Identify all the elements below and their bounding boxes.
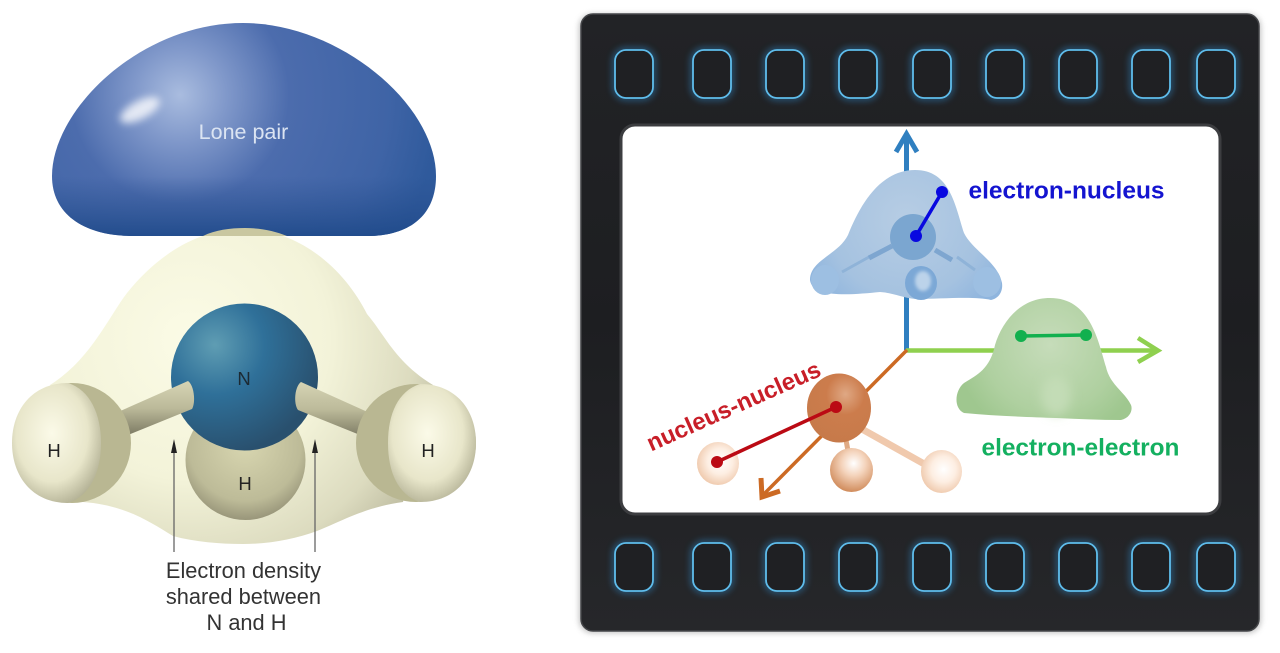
arrow: left shared density <box>171 439 177 552</box>
caption: electron density: Electron density <box>166 558 321 583</box>
hydrogen atom: left <box>12 383 131 503</box>
nitrogen atom: N <box>237 368 251 389</box>
panel: ammonia molecule electron density <box>12 23 476 635</box>
hydrogen atom: right: H <box>421 440 435 461</box>
axis: horizontal green arrow <box>906 338 1158 362</box>
label: nucleus-nucleus: nucleus-nucleus <box>643 356 825 457</box>
arrow: right shared density <box>312 439 318 552</box>
label: electron-nucleus: electron-nucleus <box>968 178 1165 204</box>
cream electron density surface <box>50 229 433 544</box>
white window <box>621 125 1220 514</box>
hydrogen atom: bottom <box>186 400 306 520</box>
caption: electron density: N and H <box>207 610 286 635</box>
axis: vertical blue arrow <box>896 134 917 350</box>
label: electron-electron: electron-electron <box>982 434 1179 462</box>
blue molecule: electron-nucleus <box>810 170 1002 300</box>
green molecule: electron-electron <box>956 298 1132 420</box>
bond: left N-H <box>118 381 194 435</box>
sprocket holes: bottom row <box>615 543 1235 591</box>
panel: film frame <box>579 14 1261 633</box>
hydrogen atom: right <box>356 384 476 502</box>
axis: diagonal orange arrow <box>761 350 907 497</box>
nitrogen atom <box>171 304 318 450</box>
lone pair lobe <box>52 23 436 236</box>
bond: right N-H <box>295 382 372 437</box>
caption: electron density: shared between <box>166 584 321 609</box>
sprocket holes: top row <box>615 50 1235 98</box>
orange molecule: nucleus-nucleus <box>697 374 962 493</box>
chart: molecular coordinate axes and interactions <box>643 134 1179 497</box>
hydrogen atom: bottom: H <box>238 473 252 494</box>
hydrogen atom: left: H <box>47 440 61 461</box>
label: lone pair: Lone pair <box>199 120 288 144</box>
electron density cap over lone pair <box>203 228 287 236</box>
